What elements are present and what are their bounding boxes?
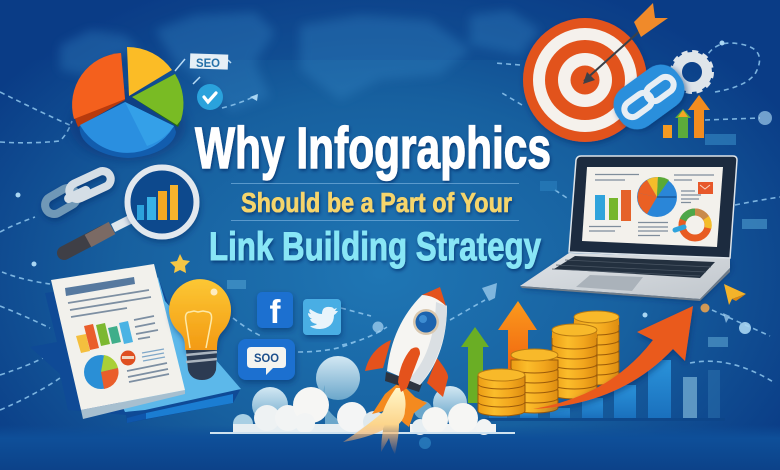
icon: gear <box>672 52 712 92</box>
bar chart <box>485 360 725 421</box>
subtitle: Should be a Part of Your: Should be a Part of Your <box>241 187 512 218</box>
laptop keyboard <box>554 256 715 278</box>
icon: speech bubble badge <box>238 339 295 380</box>
rocket <box>343 287 448 454</box>
screen donut chart <box>675 212 708 238</box>
paper plane icon <box>724 284 746 305</box>
laptop <box>520 156 737 301</box>
screen pie chart <box>637 177 677 217</box>
growth arrows green and orange <box>461 301 537 403</box>
rocket flame <box>372 384 427 427</box>
laptop screen <box>569 156 737 258</box>
icon: twitter <box>303 299 341 335</box>
coin stack 2 <box>511 349 558 413</box>
rocket window <box>413 309 439 335</box>
paper <box>81 390 185 419</box>
world map backdrop <box>60 10 540 112</box>
star <box>170 254 190 273</box>
coin stack 4 <box>574 311 619 385</box>
SEO tag <box>175 53 231 84</box>
title line: Link Building Strategy: Link Building Strategy <box>209 225 542 269</box>
rocket fins <box>365 340 391 371</box>
pie chart <box>70 47 186 161</box>
coin stacks <box>478 311 619 416</box>
icon: facebook: f <box>270 293 282 330</box>
laptop base <box>520 253 730 299</box>
title line: Why Infographics: Why Infographics <box>195 116 551 181</box>
title <box>195 116 551 269</box>
folder <box>30 277 240 423</box>
paper pie <box>84 350 136 389</box>
icon: speech bubble badge: SOO <box>254 353 279 365</box>
icon: magnifying glass with bars <box>64 168 196 253</box>
small growth arrows <box>663 95 710 138</box>
SEO tag: SEO <box>196 56 220 70</box>
icon: target with arrow <box>523 3 668 142</box>
rocket nozzle <box>385 372 422 392</box>
coin stack 1 <box>478 369 525 416</box>
icon: facebook <box>257 292 293 330</box>
rocket body <box>387 295 447 385</box>
icon: light bulb <box>169 279 231 380</box>
document with charts <box>30 264 241 423</box>
screen bar chart <box>595 190 631 221</box>
screen envelope icon <box>698 182 713 194</box>
icon: blue chain badge <box>606 57 692 137</box>
dashed connector lines <box>0 43 780 410</box>
screen text lines <box>589 174 714 236</box>
red growth arrow <box>533 306 693 409</box>
clouds <box>210 356 515 435</box>
icon: chain links <box>42 168 113 217</box>
icon: check badge <box>197 84 223 110</box>
coin stack 3 <box>552 324 597 399</box>
paper bar chart <box>76 321 133 353</box>
